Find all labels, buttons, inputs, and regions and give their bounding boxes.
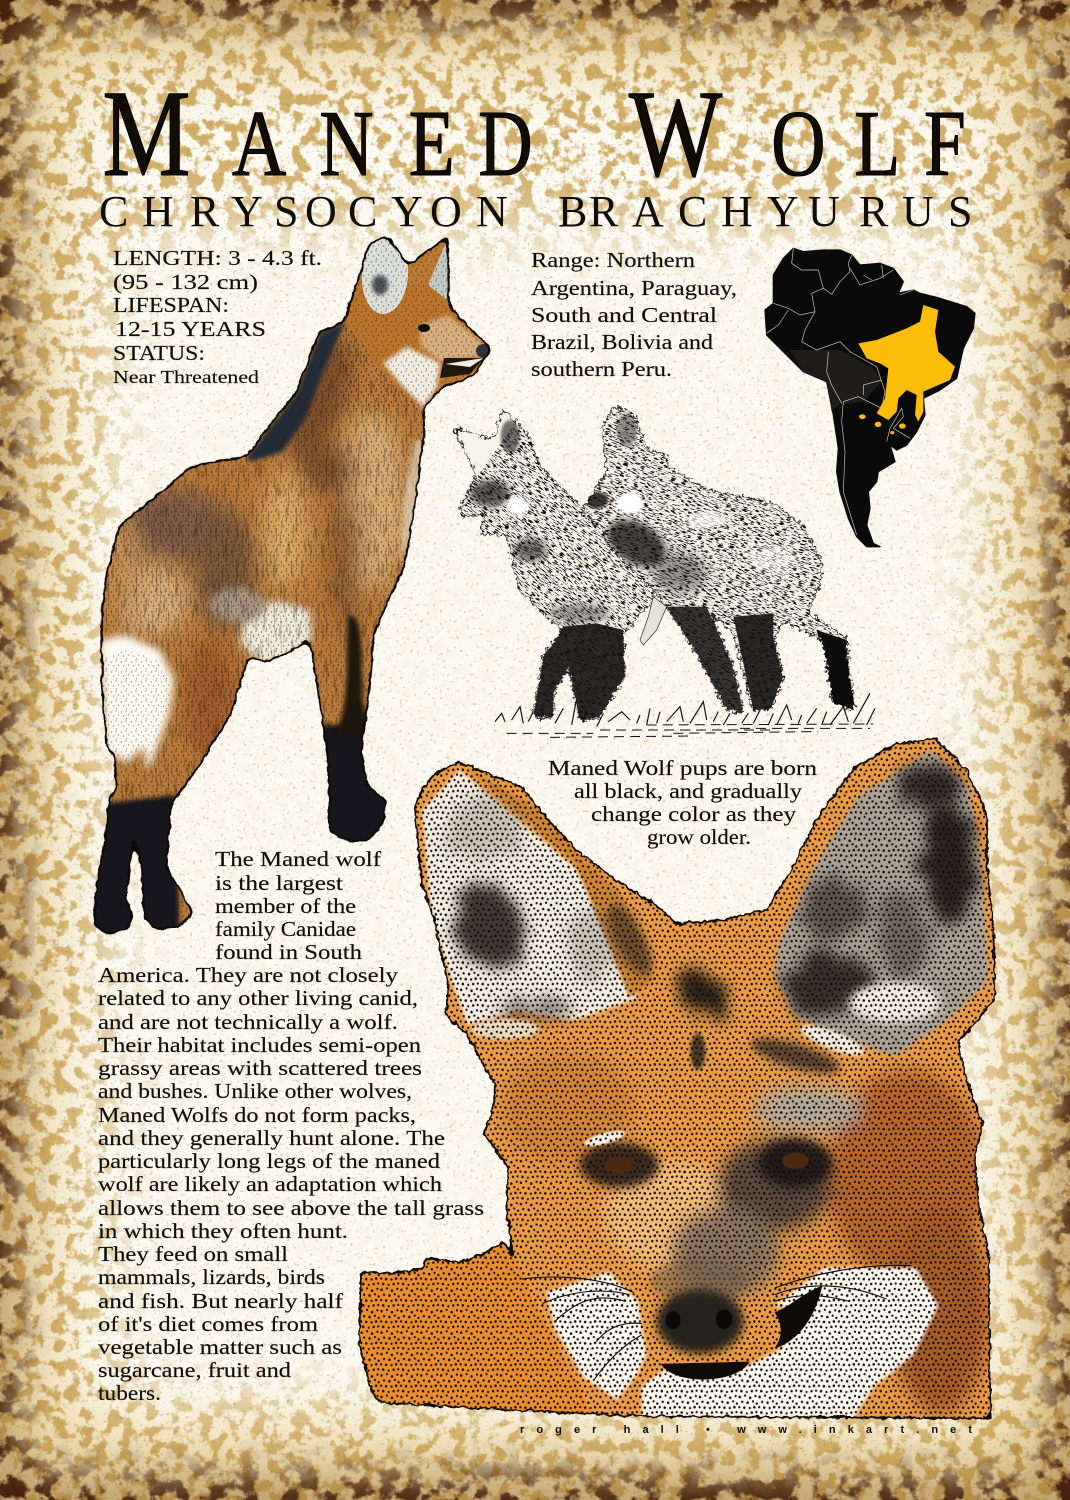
text block: main description: Maned Wolfs do not form packs, <box>98 1103 416 1127</box>
text block: vital statistics <box>113 246 322 387</box>
range map of South America <box>765 248 975 547</box>
text block: main description: related to any other living canid, <box>98 986 418 1010</box>
text block: main description: of it's diet comes from <box>98 1312 318 1336</box>
text block: main description: vegetable matter such as <box>98 1335 342 1359</box>
portrait: lower left shoulder <box>360 1243 592 1417</box>
text block: main description: wolf are likely an adaptation which <box>98 1172 442 1196</box>
text block: main description: tubers. <box>98 1381 161 1405</box>
pup: tail <box>640 597 667 645</box>
text block: main description: Their habitat includes semi-open <box>98 1033 421 1057</box>
text block: pups caption: grow older. <box>647 825 751 849</box>
text block: vital statistics: STATUS: <box>113 341 205 365</box>
text block: range: Argentina, Paraguay, <box>531 276 737 300</box>
text block: pups caption: all black, and gradually <box>574 779 802 803</box>
text block: main description: is the largest <box>215 871 343 895</box>
portrait: eyes <box>580 1143 659 1188</box>
text block: main description: member of the <box>215 894 356 918</box>
illustration: full-body maned wolf <box>90 230 500 945</box>
subtitle: BRACHYURUS <box>558 187 972 236</box>
text block: main description <box>98 847 484 1405</box>
portrait: forehead marks <box>667 960 733 1026</box>
wolf: black stockings <box>90 795 180 945</box>
text block: range: southern Peru. <box>531 357 672 381</box>
portrait: whiskers <box>522 1265 911 1380</box>
text block: main description: grassy areas with scattered trees <box>98 1056 422 1080</box>
text block: main description: and fish. But nearly half <box>98 1289 344 1313</box>
pup: left <box>452 409 656 723</box>
portrait: stipple texture <box>356 730 1003 1426</box>
text block: main description: and they generally hunt alone. The <box>98 1126 445 1150</box>
text block: main description: sugarcane, fruit and <box>98 1358 291 1382</box>
text block: vital statistics: Near Threatened <box>113 367 259 387</box>
wolf: head <box>345 237 490 407</box>
wolf: pale belly <box>240 600 312 668</box>
text block: vital statistics: LENGTH: 3 - 4.3 ft. <box>113 246 322 270</box>
wolf: black mane <box>247 322 345 462</box>
subtitle: CHRYSOCYON <box>99 187 508 236</box>
portrait: muzzle and nose <box>650 1259 750 1304</box>
portrait: white cheek patches <box>547 1272 646 1400</box>
wolf: white tail tip <box>100 635 174 772</box>
text block: main description: mammals, lizards, birds <box>98 1265 325 1289</box>
text block: main description: and are not technically a wolf. <box>98 1010 398 1034</box>
subtitle <box>99 187 972 236</box>
text block: range <box>531 248 737 381</box>
grass <box>495 693 875 737</box>
pup: right <box>578 405 858 715</box>
illustration: close-up maned wolf portrait <box>356 730 1003 1426</box>
text block: range: South and Central <box>531 303 717 327</box>
text block: vital statistics: 12-15 YEARS <box>115 317 266 341</box>
portrait: right ear <box>775 750 988 1056</box>
text block: pups caption: Maned Wolf pups are born <box>548 756 817 780</box>
title: ANED <box>232 92 533 196</box>
text block: main description: particularly long legs of the maned <box>98 1149 440 1173</box>
text block: main description: America. They are not closely <box>98 963 398 987</box>
text block: range: Range: Northern <box>531 248 695 272</box>
wolf: fur texture <box>102 250 480 923</box>
text block: main description: allows them to see above the tall grass <box>98 1196 484 1220</box>
title: W <box>629 66 722 203</box>
illustration: two maned wolf pups <box>452 405 876 738</box>
text block: main description: family Canidae <box>215 917 356 941</box>
map: yellow range area <box>858 305 955 422</box>
text block: pups caption: change color as they <box>591 802 796 826</box>
text block: main description: found in South <box>215 940 362 964</box>
text block: main description: and bushes. Unlike other wolves, <box>98 1079 412 1103</box>
title <box>102 66 966 203</box>
portrait: left ear <box>422 770 638 1025</box>
title: OLF <box>771 92 966 196</box>
portrait: fur tones <box>501 1051 990 1413</box>
wolf: ears <box>362 238 408 314</box>
text block: vital statistics: (95 - 132 cm) <box>113 270 258 294</box>
text block: main description: They feed on small <box>98 1242 288 1266</box>
text block: main description: in which they often hunt. <box>98 1219 348 1243</box>
portrait: eye irises <box>605 1157 633 1173</box>
text block: range: Brazil, Bolivia and <box>531 330 713 354</box>
wolf: mottled fur shading <box>107 331 406 760</box>
text block: main description: The Maned wolf <box>215 847 382 871</box>
text block: vital statistics: LIFESPAN: <box>113 293 229 317</box>
title: M <box>102 66 191 203</box>
text block: pups caption <box>548 756 817 849</box>
credit line: roger hall • www.inkart.net <box>520 1424 972 1436</box>
